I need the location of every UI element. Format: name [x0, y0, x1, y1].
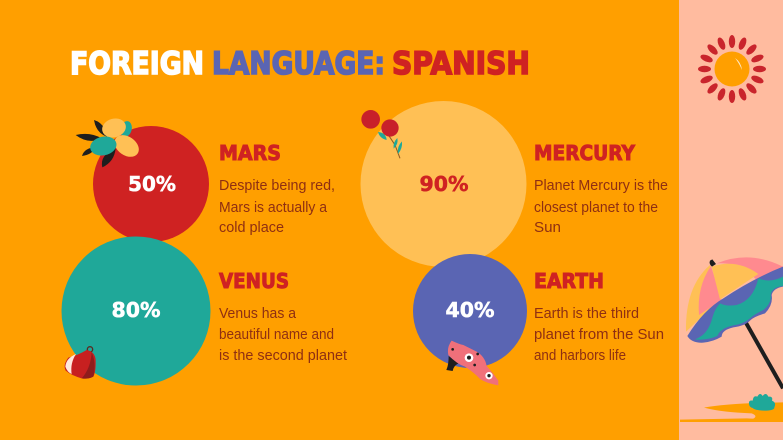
text block: Mars	[219, 141, 335, 236]
text block: Mercury: Sun	[534, 220, 561, 236]
title	[70, 46, 530, 82]
title: LANGUAGE:	[212, 46, 385, 82]
circle: Mars 50%	[93, 126, 209, 242]
text block: Mars: MARS	[219, 141, 281, 165]
icon: sun	[698, 35, 766, 103]
text block: Mercury: Planet Mercury is the	[534, 178, 668, 194]
text block: Mars: Mars is actually a	[219, 200, 328, 216]
text block: Mercury	[534, 141, 668, 236]
panel: right beach strip	[679, 0, 783, 440]
text block: Venus	[219, 269, 347, 364]
icon: beach umbrella	[686, 257, 783, 388]
circle: Mercury 90%	[360, 101, 526, 267]
circle: Earth 40%	[413, 254, 527, 368]
text block: Earth: and harbors life	[534, 348, 626, 364]
text block: Mars: Despite being red,	[219, 178, 335, 194]
title: SPANISH	[392, 46, 530, 82]
text block: Earth: Earth is the third	[534, 306, 639, 322]
sand and bush	[680, 394, 783, 422]
text block: Venus: beautiful name and	[219, 327, 334, 343]
text block: Mercury: MERCURY	[534, 141, 635, 165]
text block: Venus: VENUS	[219, 269, 289, 293]
text block: Mars: cold place	[219, 220, 284, 236]
circle: Venus 80%: 80%	[112, 298, 160, 322]
text block: Earth	[534, 269, 664, 364]
icon: pink heeled shoe	[446, 341, 498, 385]
text block: Earth: planet from the Sun	[534, 327, 664, 343]
text block: Venus: Venus has a	[219, 306, 297, 322]
icon: red fruit	[65, 347, 96, 379]
text block: Mercury: closest planet to the	[534, 200, 658, 216]
text block: Venus: is the second planet	[219, 348, 347, 364]
icon: red carnations	[361, 110, 402, 158]
icon: lemons and leaves	[76, 116, 143, 167]
circle: Earth 40%: 40%	[446, 298, 494, 322]
circle: Venus 80%	[62, 236, 210, 386]
text block: Earth: EARTH	[534, 269, 604, 293]
circle: Mars 50%: 50%	[128, 172, 176, 196]
title: FOREIGN	[70, 46, 204, 82]
circle: Mercury 90%: 90%	[420, 172, 468, 196]
